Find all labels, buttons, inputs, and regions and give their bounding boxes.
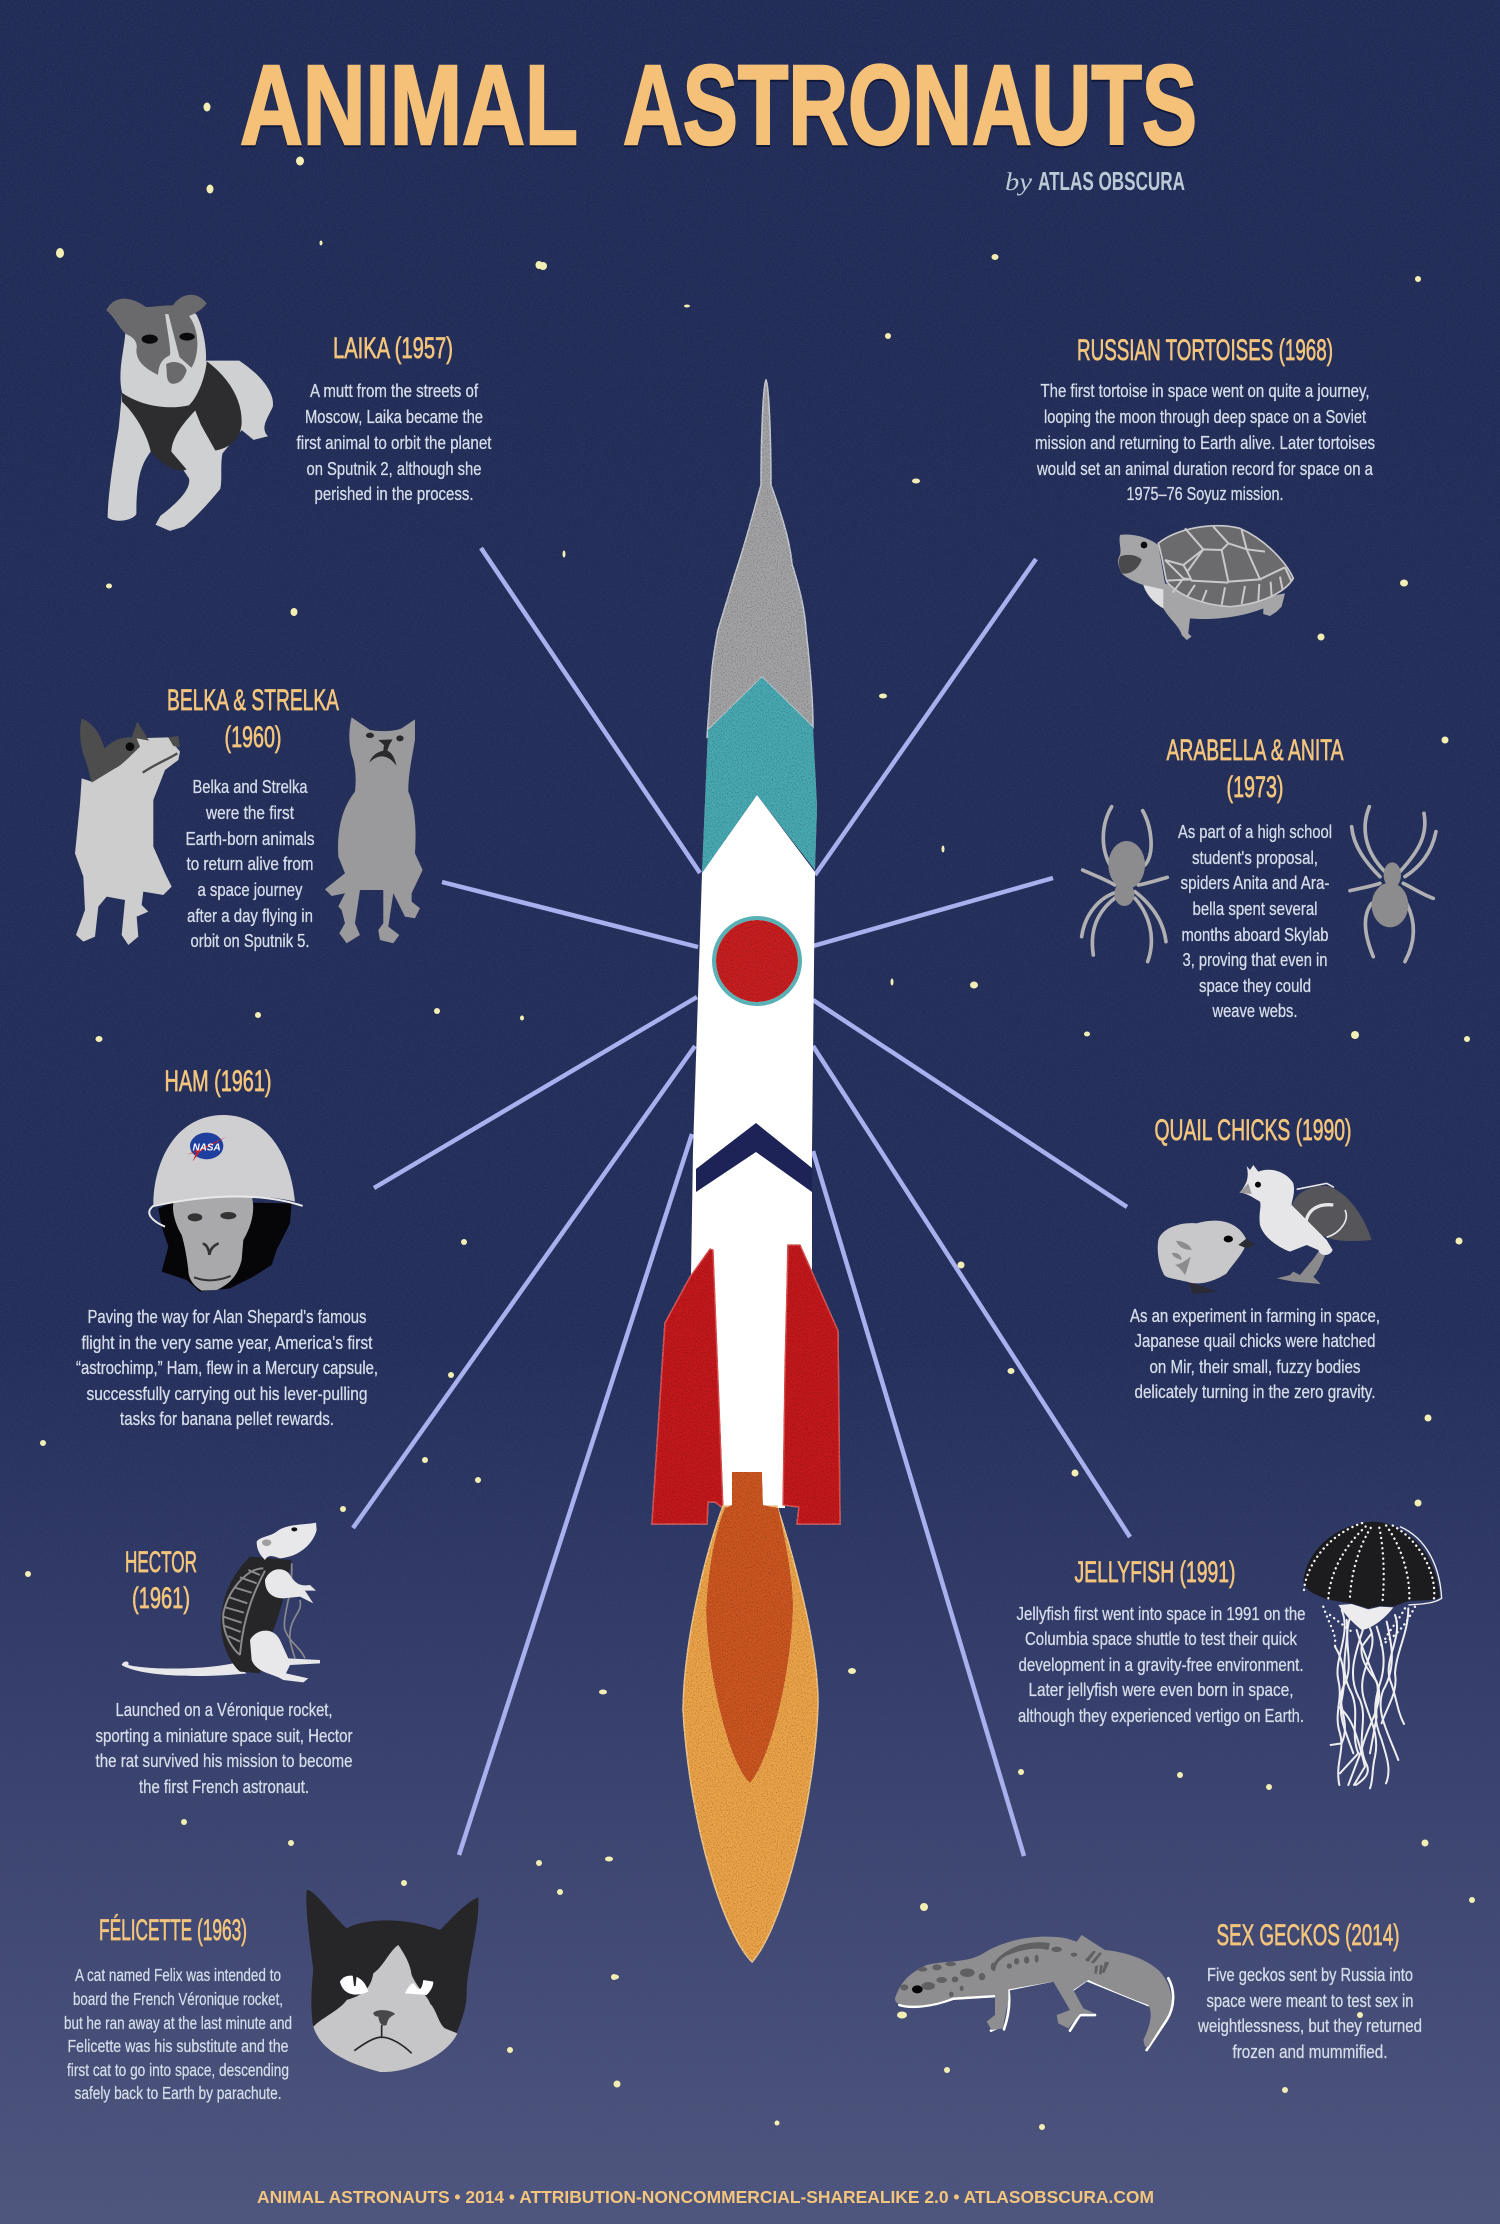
heading: Jellyfish: JELLYFISH (1991) [1074, 1556, 1236, 1589]
text: Russian tortoises: mission and returning to Earth alive. Later tortoises [1035, 432, 1375, 453]
heading: Hector: (1961) [132, 1582, 190, 1615]
text: Sex geckos: Five geckos sent by Russia into [1207, 1964, 1413, 1985]
icon: Laika dog [106, 295, 273, 531]
icon: tortoise [1118, 526, 1293, 640]
byline: ATLAS OBSCURA [1038, 166, 1185, 196]
text: Belka and Strelka: to return alive from [186, 853, 314, 874]
text: Belka and Strelka: Belka and Strelka [192, 776, 308, 797]
icon: quail chicks [1158, 1165, 1372, 1294]
rocket teal chevron [702, 677, 817, 873]
text: Hector: sporting a miniature space suit, Hector [96, 1725, 352, 1746]
text: Hector [96, 1699, 352, 1797]
title [240, 42, 1197, 168]
byline [1005, 166, 1185, 196]
rocket body white [691, 795, 815, 1508]
panel: Jellyfish [1016, 1522, 1442, 1788]
heading: Belka and Strelka [167, 684, 339, 754]
text: Laika: perished in the process. [314, 483, 474, 504]
text: Quail chicks: Japanese quail chicks were hatched [1134, 1330, 1376, 1351]
icon: spiders [1082, 807, 1436, 962]
panel: Russian tortoises [1035, 334, 1375, 640]
panel: Belka and Strelka [75, 684, 423, 951]
heading: Laika: LAIKA (1957) [333, 332, 453, 365]
text: Belka and Strelka [186, 776, 314, 951]
text: Sex geckos: frozen and mummified. [1232, 2041, 1388, 2062]
text: Félicette: A cat named Felix was intended to [75, 1965, 281, 1985]
text: Félicette: board the French Véronique rocket, [73, 1989, 283, 2009]
text: Ham: Paving the way for Alan Shepard's famous [88, 1306, 366, 1327]
text: Hector: the first French astronaut. [139, 1776, 309, 1797]
text: Arabella and Anita: As part of a high school [1178, 821, 1332, 842]
text: Laika: Moscow, Laika became the [305, 406, 483, 427]
text: Jellyfish: Columbia space shuttle to test their quick [1025, 1628, 1298, 1649]
heading: Hector: HECTOR [125, 1546, 197, 1579]
text: Quail chicks: on Mir, their small, fuzzy bodies [1150, 1356, 1360, 1377]
text: Félicette: but he ran away at the last minute and [64, 2013, 292, 2033]
text: Arabella and Anita: space they could [1199, 975, 1311, 996]
text: Sex geckos: space were meant to test sex in [1206, 1990, 1414, 2011]
panel: Laika [106, 295, 492, 531]
text: Belka and Strelka: Earth-born animals [186, 828, 314, 849]
panel: Ham [76, 1065, 378, 1429]
footer: ANIMAL ASTRONAUTS • 2014 • ATTRIBUTION-NONCOMMERCIAL-SHAREALIKE 2.0 • ATLASOBSCURA.COM [257, 2187, 1154, 2207]
heading: Félicette: FÉLICETTE (1963) [99, 1914, 247, 1947]
text: Félicette [64, 1965, 292, 2103]
panel: Arabella and Anita [1082, 734, 1436, 1021]
text: Laika: A mutt from the streets of [310, 380, 479, 401]
text: Arabella and Anita: student's proposal, [1192, 847, 1318, 868]
text: Jellyfish: Later jellyfish were even born in space, [1028, 1679, 1294, 1700]
title: ANIMAL [240, 42, 578, 168]
text: Laika: first animal to orbit the planet [296, 432, 492, 453]
heading: Hector [125, 1546, 197, 1615]
heading: Belka and Strelka: (1960) [224, 721, 282, 754]
byline: by [1005, 169, 1033, 196]
heading: Ham: HAM (1961) [164, 1065, 272, 1098]
text: Jellyfish: Jellyfish first went into space in 1991 on the [1016, 1603, 1306, 1624]
text: Arabella and Anita [1178, 821, 1332, 1021]
rocket porthole [712, 916, 802, 1006]
text: Russian tortoises: would set an animal duration record for space on a [1036, 458, 1374, 479]
text: Laika [296, 380, 492, 504]
text: Belka and Strelka: were the first [205, 802, 295, 823]
rocket flame outer [683, 1506, 818, 1962]
rays from rocket to animals [353, 548, 1130, 1856]
text: Belka and Strelka: a space journey [198, 879, 303, 900]
text: Arabella and Anita: spiders Anita and Ara- [1180, 872, 1330, 893]
text: Félicette: safely back to Earth by parachute. [74, 2083, 282, 2103]
text: Ham [76, 1306, 378, 1429]
text: Russian tortoises [1035, 380, 1375, 504]
heading: Quail chicks: QUAIL CHICKS (1990) [1154, 1114, 1352, 1147]
text: Ham: successfully carrying out his lever-pulling [86, 1383, 368, 1404]
rocket nose spire and cone grey [707, 380, 813, 738]
panel: Sex geckos [895, 1919, 1422, 2062]
text: Hector: the rat survived his mission to become [96, 1750, 352, 1771]
text: Jellyfish: although they experienced vertigo on Earth. [1018, 1705, 1304, 1726]
icon: gecko [895, 1935, 1173, 2050]
heading: Belka and Strelka: BELKA & STRELKA [167, 684, 339, 717]
panel: Hector [96, 1523, 352, 1797]
rocket [652, 380, 840, 1962]
text: Ham: flight in the very same year, America's first [82, 1332, 373, 1353]
icon: Belka dog [75, 718, 180, 945]
text: Arabella and Anita: weave webs. [1212, 1000, 1298, 1021]
text: Quail chicks: delicately turning in the zero gravity. [1134, 1381, 1376, 1402]
rocket fin left [652, 1249, 723, 1524]
icon: NASA logo: NASA [193, 1143, 221, 1154]
text: Ham: “astrochimp,” Ham, flew in a Mercury capsule, [76, 1357, 378, 1378]
icon: chimp with helmet [149, 1115, 303, 1292]
panel: Quail chicks [1130, 1114, 1380, 1402]
text: Russian tortoises: looping the moon through deep space on a Soviet [1044, 406, 1367, 427]
heading: Russian tortoises: RUSSIAN TORTOISES (1968) [1077, 334, 1333, 367]
icon: cat [306, 1890, 478, 2072]
text: Arabella and Anita: months aboard Skylab [1182, 924, 1328, 945]
text: Jellyfish: development in a gravity-free environment. [1018, 1654, 1304, 1675]
heading: Sex geckos: SEX GECKOS (2014) [1216, 1919, 1400, 1952]
text: Russian tortoises: The first tortoise in space went on quite a journey, [1040, 380, 1370, 401]
text: Arabella and Anita: bella spent several [1192, 898, 1318, 919]
text: Hector: Launched on a Véronique rocket, [116, 1699, 332, 1720]
rocket fin right [783, 1245, 840, 1524]
text: Félicette: Felicette was his substitute and the [68, 2036, 288, 2056]
text: Belka and Strelka: orbit on Sputnik 5. [190, 930, 310, 951]
text: Quail chicks [1130, 1305, 1380, 1402]
icon: NASA logo [187, 1133, 227, 1162]
text: Sex geckos [1197, 1964, 1422, 2062]
text: Russian tortoises: 1975–76 Soyuz mission. [1126, 483, 1284, 504]
text: Félicette: first cat to go into space, descending [67, 2060, 289, 2080]
heading: Arabella and Anita: (1973) [1226, 771, 1284, 804]
icon: Strelka dog [325, 717, 423, 943]
rocket navy chevron [696, 1123, 812, 1192]
text: Sex geckos: weightlessness, but they returned [1197, 2015, 1422, 2036]
text: Laika: on Sputnik 2, although she [306, 458, 482, 479]
text: Quail chicks: As an experiment in farming in space, [1130, 1305, 1380, 1326]
rocket flame inner [706, 1472, 793, 1783]
text: Jellyfish [1016, 1603, 1306, 1726]
heading: Arabella and Anita: ARABELLA & ANITA [1166, 734, 1344, 767]
text: Arabella and Anita: 3, proving that even in [1182, 949, 1328, 970]
title: ASTRONAUTS [623, 42, 1197, 168]
text: Ham: tasks for banana pellet rewards. [120, 1408, 334, 1429]
icon: jellyfish [1303, 1522, 1442, 1788]
panel: Félicette [64, 1890, 478, 2103]
icon: rat in space suit [122, 1523, 320, 1682]
heading: Arabella and Anita [1166, 734, 1344, 804]
text: Belka and Strelka: after a day flying in [187, 905, 313, 926]
